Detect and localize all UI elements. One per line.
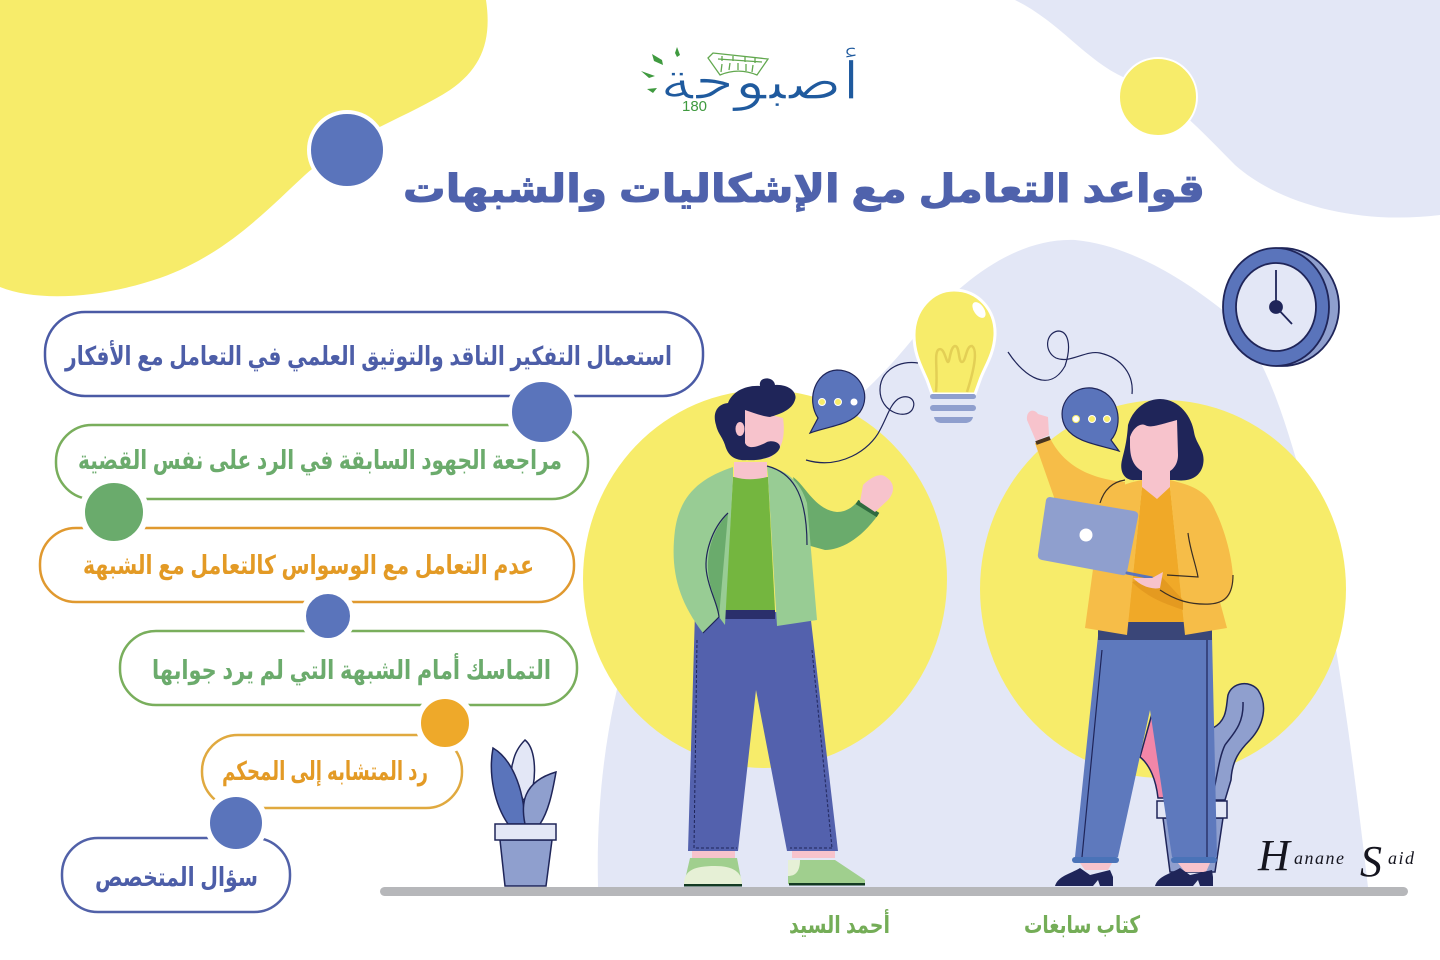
- signature: S: [1360, 837, 1382, 886]
- list item 3: عدم التعامل مع الوسواس كالتعامل مع الشبهة: [83, 550, 534, 581]
- man jacket: [674, 467, 733, 633]
- man hand: [860, 475, 893, 512]
- man ear: [736, 422, 744, 436]
- woman shirt: [1128, 487, 1184, 622]
- icon: right potted plant: [1140, 684, 1264, 872]
- title: قواعد التعامل مع الإشكاليات والشبهات: [403, 168, 1205, 212]
- connector dot: blue item 1: [509, 379, 575, 445]
- character: woman: [1027, 399, 1233, 886]
- name: Sabighat book: كتاب سابغات: [1024, 912, 1140, 939]
- woman lower hand: [1133, 572, 1163, 588]
- yellow circle: left: [583, 390, 947, 768]
- list item 2: [56, 425, 588, 499]
- man right shoe: [788, 860, 865, 884]
- arrow: wire from man to bulb: [806, 362, 918, 463]
- list item 5: رد المتشابه إلى المحكم: [222, 756, 428, 787]
- list item 6: [62, 838, 290, 912]
- woman raised hand: [1027, 411, 1049, 441]
- list item 4: [120, 631, 577, 705]
- man left shoe: [684, 858, 742, 884]
- man pants: [688, 612, 838, 851]
- list item 6: سؤال المتخصص: [95, 862, 258, 893]
- logo: [641, 47, 860, 115]
- man sleeve: [793, 477, 878, 550]
- list item 1: [45, 312, 703, 396]
- list item 2: مراجعة الجهود السابقة في الرد على نفس القضية: [78, 445, 562, 476]
- character: man: [674, 378, 893, 886]
- icon: left potted plant: [491, 740, 556, 886]
- background blob: lavender behind characters: [598, 240, 1368, 887]
- list item 5: [202, 735, 462, 808]
- connector dot: green: [82, 480, 146, 544]
- woman hair: [1121, 399, 1204, 480]
- man head: [745, 408, 784, 458]
- woman raised arm: [1035, 438, 1125, 510]
- floor line: [380, 887, 1408, 896]
- arrow: wire from woman to bulb: [1008, 331, 1132, 394]
- woman left leg: [1075, 636, 1160, 857]
- connector dot: blue item 5: [207, 794, 265, 852]
- man hair and beard: [715, 378, 796, 460]
- connector dot: blue item 3: [303, 591, 353, 641]
- signature: anane: [1294, 848, 1346, 868]
- man shirt: [725, 477, 775, 610]
- woman trouser cuffs: [1072, 857, 1119, 863]
- yellow circle: right: [980, 400, 1346, 778]
- list item 1: استعمال التفكير الناقد والتوثيق العلمي في التعامل مع الأفكار: [63, 340, 672, 372]
- list item 4: التماسك أمام الشبهة التي لم يرد جوابها: [152, 653, 551, 686]
- woman jacket: [1085, 480, 1142, 635]
- connector dot: orange: [418, 696, 472, 750]
- speech bubble: woman: [1062, 388, 1119, 451]
- logo: أصبوحة: [660, 47, 860, 112]
- icon: light bulb: [914, 290, 995, 423]
- decorative circle: yellow: [1119, 58, 1197, 136]
- decorative circle: blue: [309, 112, 385, 188]
- signature: aid: [1388, 848, 1416, 868]
- woman left shoe: [1055, 868, 1113, 886]
- speech bubble: man: [810, 370, 865, 433]
- woman right leg: [1145, 636, 1217, 857]
- name: Ahmed Elsayed: أحمد السيد: [789, 909, 890, 939]
- signature: H: [1257, 831, 1292, 880]
- woman face and neck: [1130, 420, 1178, 499]
- woman right shoe: [1155, 868, 1213, 886]
- background blob: lavender top right: [1015, 0, 1440, 218]
- laptop: [1038, 497, 1152, 578]
- list item 3: [40, 528, 574, 602]
- background blob: yellow top left: [0, 0, 488, 296]
- icon: clock: [1223, 248, 1339, 366]
- logo: 180: [682, 98, 707, 115]
